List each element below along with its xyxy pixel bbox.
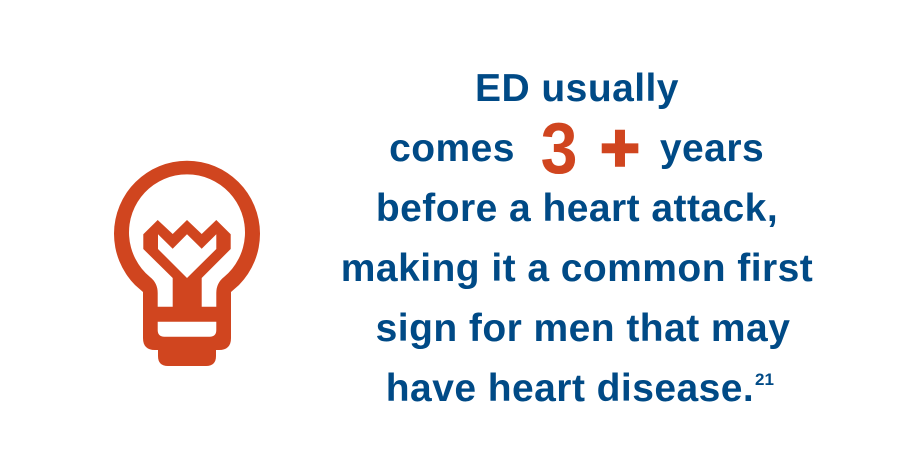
text line: comes: comes: [389, 127, 515, 170]
plus sign: +: [600, 110, 640, 186]
text block: ED message: [341, 67, 813, 410]
text line: ED usually: ED usually: [475, 67, 679, 110]
text line: sign for men that may: sign for men that may: [376, 307, 790, 350]
icon: light bulb: [114, 161, 260, 366]
text line: have heart disease: have heart disease.: [386, 367, 754, 410]
text line: years: years: [660, 127, 764, 170]
big number: 3: 3: [541, 107, 577, 189]
text line: making it a common first: making it a common first: [341, 247, 813, 290]
citation superscript: 21: [755, 370, 774, 389]
text line: before a heart attack: before a heart attack,: [376, 187, 778, 230]
